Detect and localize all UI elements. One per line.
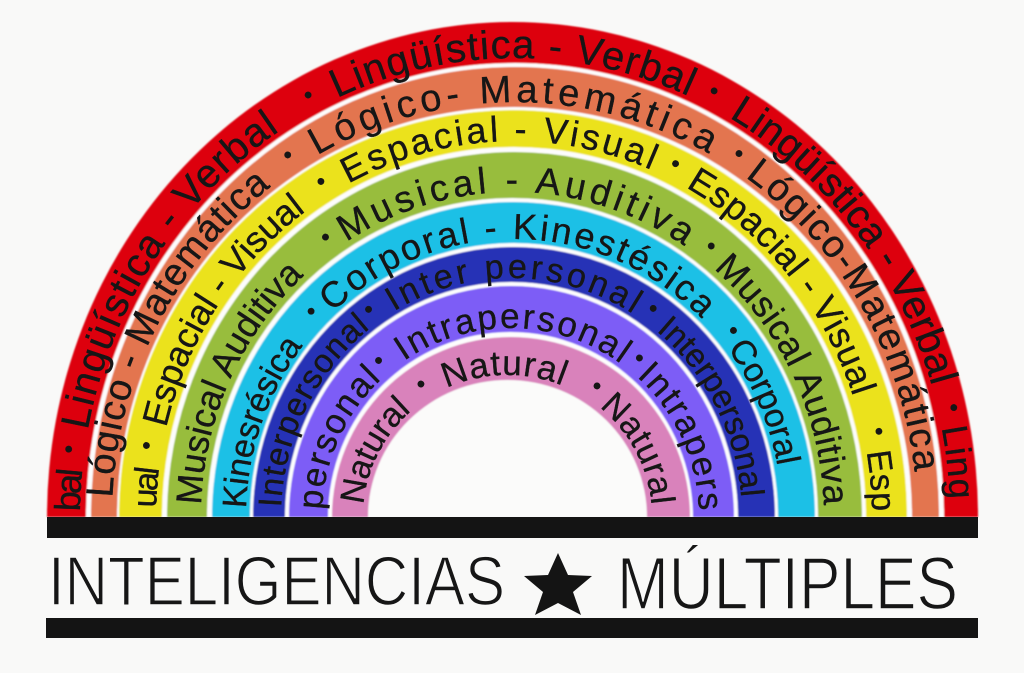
text: green band: Musical - Auditiva: [336, 166, 691, 246]
rainbow inner hole: [368, 380, 647, 517]
top black bar: [47, 517, 978, 538]
text: red band: Lingüística - Verbal: [61, 108, 278, 428]
bottom black bar: [46, 618, 978, 638]
band: cyan: [212, 202, 815, 517]
text: pink band: [340, 352, 676, 503]
band: red: [47, 22, 978, 517]
text: yellow band: Espacial - Visual: [340, 115, 660, 182]
text: cyan band: [222, 214, 802, 506]
text: red band: Ling: [942, 426, 972, 497]
text: green band: Musical Auditiva: [716, 252, 846, 506]
text: red band: •: [65, 446, 72, 453]
text: yellow band: •: [143, 442, 150, 449]
text: yellow band: •: [876, 428, 882, 435]
text: dark blue band: •: [365, 306, 372, 313]
text: red band: •: [304, 92, 312, 98]
text: dark blue band: •: [650, 305, 657, 312]
text: dark blue band: Interpersonal: [258, 311, 368, 505]
text: purple band: Intrapersonal: [387, 297, 638, 370]
band: orange: [91, 67, 939, 517]
text: dark blue band: Interpersonal: [658, 316, 766, 496]
text: pink band: •: [410, 371, 432, 398]
text: red band: Lingüística - Verbal: [732, 96, 960, 384]
text: yellow band: Espacial - Visual: [688, 167, 878, 394]
text: cyan band: Kinesrésica: [222, 339, 303, 506]
text: yellow band: Esp: [864, 451, 893, 510]
text: yellow band: ual: [134, 467, 159, 506]
text: pink band: Natural: [333, 389, 417, 506]
text: pink band: Natural: [436, 344, 573, 395]
text: green band: [176, 166, 846, 506]
band: yellow: [119, 110, 907, 517]
text: cyan band: Corporal - Kinestésica: [322, 214, 711, 319]
band: pink: [332, 337, 690, 517]
text: green band: •: [322, 234, 329, 240]
text: red band: [54, 30, 972, 510]
rainbow colour bands: [47, 22, 978, 517]
band: dark blue: [253, 247, 775, 517]
text: dark blue band: Inter personal: [384, 260, 644, 313]
text: red band: •: [710, 87, 718, 94]
text: green band: •: [708, 242, 715, 250]
title: right word: MÚLTIPLES: [617, 542, 958, 625]
text: cyan band: •: [308, 308, 314, 315]
text: purple band: [304, 309, 718, 510]
text: orange band: Lógico- Matemática: [307, 76, 714, 154]
text: cyan band: •: [730, 327, 737, 334]
text: purple band: •: [375, 357, 382, 364]
text: green band: Musical Auditiva: [176, 266, 304, 502]
band: green: [167, 152, 862, 517]
text: yellow band: Espacial - Visual: [142, 192, 304, 426]
text: orange band: •: [284, 152, 292, 158]
text: orange band: Lógico - Matemática: [86, 175, 271, 495]
text: purple band: personal: [304, 362, 380, 508]
text: red band: •: [950, 404, 958, 411]
text: yellow band: [134, 115, 893, 510]
title: left word: INTELIGENCIAS: [48, 542, 505, 620]
text: yellow band: •: [672, 160, 679, 168]
text: red band: Lingüística - Verbal: [328, 30, 698, 97]
text: orange band: Lógico-Matemática: [747, 158, 934, 472]
text: orange band: [86, 76, 934, 495]
text: purple band: Intrapers: [631, 354, 730, 511]
band: purple: [289, 286, 734, 517]
text: red band: bal: [54, 469, 82, 510]
icon: star: [524, 553, 592, 615]
text: yellow band: •: [318, 178, 324, 185]
text: dark blue band: [258, 260, 766, 505]
text: cyan band: Corporal: [732, 340, 802, 464]
text: pink band: •: [586, 373, 608, 400]
text: purple band: •: [627, 345, 651, 371]
text: pink band: Natural: [594, 385, 681, 506]
text: orange band: •: [736, 150, 742, 157]
